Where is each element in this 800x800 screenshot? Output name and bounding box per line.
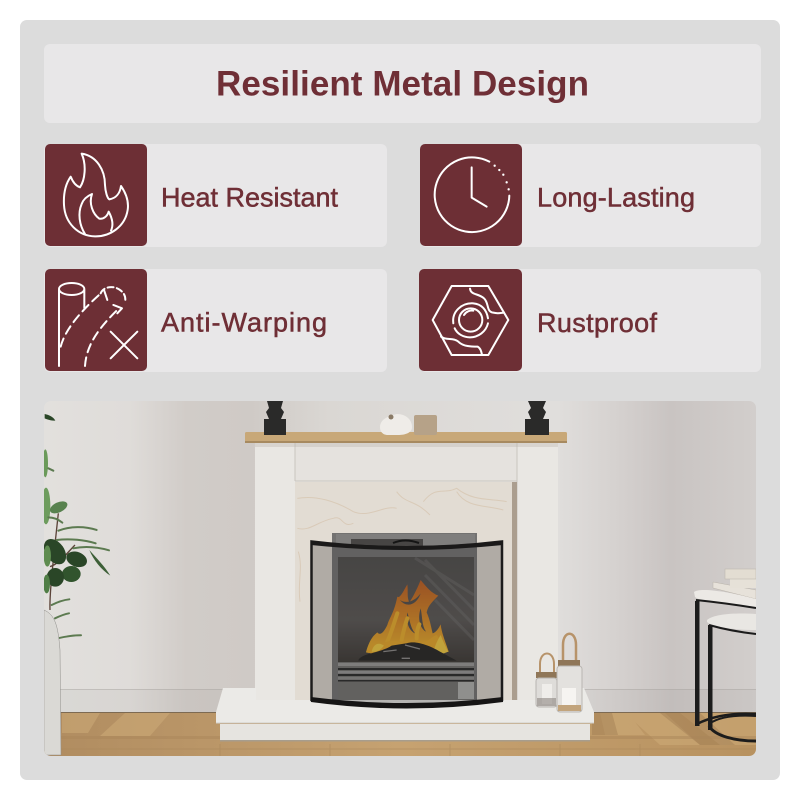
card: Long-Lasting [420,144,761,247]
photo: fireplace room scene [39,401,756,756]
large table [694,590,756,607]
metal mesh fire screen [311,540,503,708]
green plant [39,414,110,638]
title banner [44,44,761,123]
books [713,569,756,599]
card: Rustproof [419,269,761,372]
white ceramic pumpkin [380,414,412,435]
left black ornament [264,401,286,435]
electric stove insert [332,533,477,700]
mantel shelf [245,432,567,443]
icon: clock [420,144,522,246]
icon: rusted hex nut [419,269,522,371]
large lantern [557,634,582,712]
label: Rustproof [537,308,657,338]
label: Long-Lasting [537,182,695,212]
icon: warped tube with cross [45,269,147,371]
right black ornament [525,401,549,435]
coal logs [358,642,457,661]
fireplace surround [255,443,558,701]
label: Anti-Warping [161,308,327,338]
icon: flame [45,144,147,246]
grille bars [338,662,474,700]
small lantern [536,654,557,707]
hearth [216,688,594,742]
marble back panel [295,482,517,700]
gold candle holder [414,415,437,435]
wall [147,401,756,712]
grey fabric vase [44,610,61,755]
title: Resilient Metal Design [216,64,589,104]
label: Heat Resistant [161,182,338,212]
flames [366,580,449,654]
card: Heat Resistant [44,144,387,247]
wooden floor [44,713,756,756]
small table [707,614,756,630]
card: Anti-Warping [44,269,387,372]
nesting side tables with books [694,569,756,741]
skirting board [60,689,756,714]
glass lanterns [536,634,582,712]
